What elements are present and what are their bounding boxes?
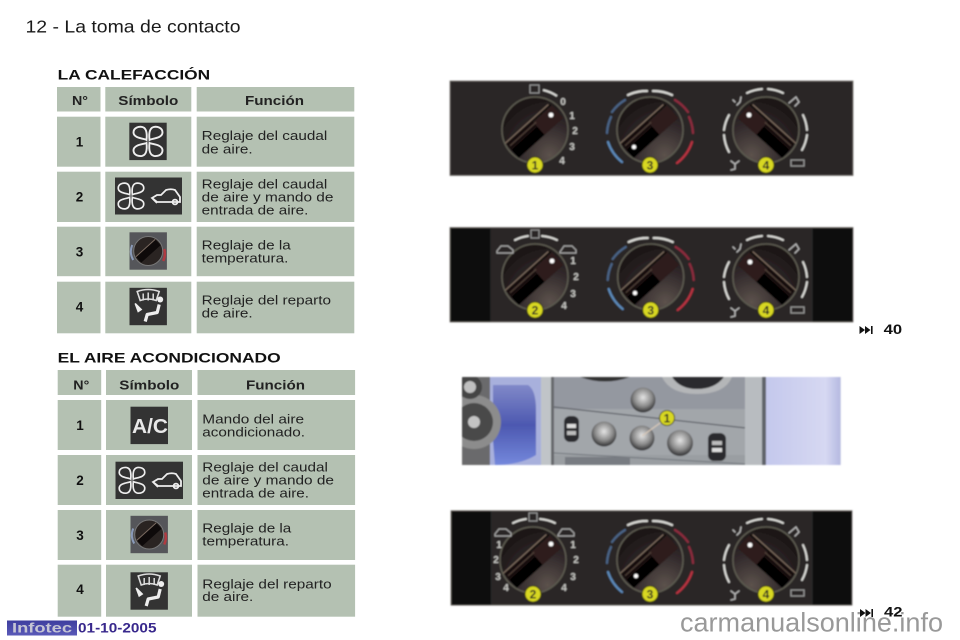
page reference: 42 <box>860 604 903 620</box>
dial 3 <box>607 91 693 173</box>
panel: heating controls, fan and air intake version <box>450 228 853 322</box>
dial 2 <box>493 513 579 602</box>
control knobs <box>592 388 693 456</box>
row 4: Reglaje del reparto <box>202 576 332 591</box>
row 2 <box>58 455 355 505</box>
row 2: de aire y mando de <box>202 190 333 204</box>
footer badge: Infotec: Infotec <box>12 620 72 636</box>
panel: dashboard photo with A/C control <box>447 375 841 465</box>
heading: la calefacción: LA CALEFACCIÓN <box>58 66 210 83</box>
dial 2: 1 <box>570 256 576 267</box>
dial 2: 3 <box>570 289 576 300</box>
row 3: Reglaje de la <box>202 520 292 536</box>
row 1: Mando del aire <box>202 411 304 426</box>
header row: N° <box>72 93 88 108</box>
dial 2: 4 <box>503 583 509 594</box>
row 1: 1 <box>76 418 84 433</box>
header row: Símbolo <box>119 377 179 392</box>
header row: N° <box>73 377 89 392</box>
switches <box>564 416 726 461</box>
dial 2: 3 <box>570 572 576 583</box>
dial 2 <box>497 230 579 318</box>
row 1: 1 <box>76 134 84 150</box>
dial 2: 3 <box>495 572 501 583</box>
panel: air conditioning controls <box>451 511 852 605</box>
row 4: 4 <box>76 582 84 597</box>
row 3: Reglaje de la <box>202 237 292 252</box>
header row: Símbolo <box>118 93 178 108</box>
dial 4: 4 <box>763 304 770 318</box>
row 2: entrada de aire. <box>202 202 308 217</box>
dial 4: 4 <box>763 588 770 602</box>
row 4: de aire. <box>202 305 253 320</box>
dial 1: 2 <box>572 126 578 137</box>
dial 2: 2 <box>532 304 539 318</box>
row 4: Reglaje del reparto <box>202 292 331 307</box>
row 1: de aire. <box>202 141 253 156</box>
callout 1: 1 <box>664 412 671 426</box>
header row <box>57 87 354 112</box>
dial 3 <box>607 521 693 602</box>
dial 2: 2 <box>530 588 537 602</box>
row 1 <box>57 117 354 167</box>
dial 3: 3 <box>647 588 654 602</box>
dial 2: 1 <box>570 540 576 551</box>
dial 2: 2 <box>573 555 579 566</box>
dial 3 <box>608 238 694 318</box>
row 3: 3 <box>76 245 84 260</box>
row 2: 2 <box>76 473 84 488</box>
callout 1 <box>642 410 674 436</box>
title: 12 - La toma de contacto <box>26 16 240 36</box>
row 1: acondicionado. <box>202 425 305 440</box>
dial 1 <box>502 85 578 173</box>
row 3: temperatura. <box>202 534 289 548</box>
page reference: 42: 42 <box>884 604 903 620</box>
dial 4 <box>724 519 807 602</box>
header row: Función <box>245 93 304 108</box>
header row <box>58 370 355 395</box>
panel: heating controls, fan version <box>450 81 853 176</box>
page reference: 40: 40 <box>884 321 902 337</box>
row 3: temperatura. <box>202 250 288 265</box>
dial 2: 2 <box>493 555 499 566</box>
dial 1: 3 <box>569 142 575 153</box>
dial 2: 4 <box>561 301 567 312</box>
dial 1: 4 <box>559 156 565 167</box>
row 1: A/C <box>132 416 168 438</box>
row 1: Reglaje del caudal <box>202 128 327 143</box>
dial 1: 0 <box>560 97 566 108</box>
row 4 <box>58 565 355 617</box>
row 2 <box>57 172 354 222</box>
dial 3: 3 <box>647 304 654 318</box>
row 2: de aire y mando de <box>202 472 334 488</box>
row 2: Reglaje del caudal <box>202 176 327 191</box>
row 3 <box>58 510 355 560</box>
dial 4 <box>724 236 807 318</box>
dial 4 <box>724 89 807 173</box>
dial 2: 2 <box>573 272 579 283</box>
row 2: 2 <box>76 190 83 205</box>
footer badge: Infotec <box>7 620 77 636</box>
dial 1: 1 <box>532 158 539 172</box>
row 4 <box>57 282 354 333</box>
dial 4: 4 <box>763 158 770 172</box>
dial 3: 3 <box>647 158 654 172</box>
watermark: carmanualsonline.info <box>680 608 943 638</box>
dial 2: 4 <box>561 583 567 594</box>
heading: el aire acondicionado: EL AIRE ACONDICIONADO <box>58 350 281 366</box>
row 4: de aire. <box>202 589 253 604</box>
footer date: 01-10-2005 <box>78 621 157 636</box>
dial 1: 1 <box>569 111 575 122</box>
row 4: 4 <box>76 300 84 315</box>
row 1 <box>58 400 355 450</box>
row 2: entrada de aire. <box>202 486 309 500</box>
row 2: Reglaje del caudal <box>202 460 328 474</box>
page reference: 40 <box>860 321 902 337</box>
row 3: 3 <box>76 528 84 543</box>
row 3 <box>57 227 354 276</box>
dial 2: 1 <box>496 540 502 551</box>
table: la calefacción <box>57 87 354 333</box>
table: el aire acondicionado <box>58 370 355 617</box>
header row: Función <box>246 377 305 392</box>
